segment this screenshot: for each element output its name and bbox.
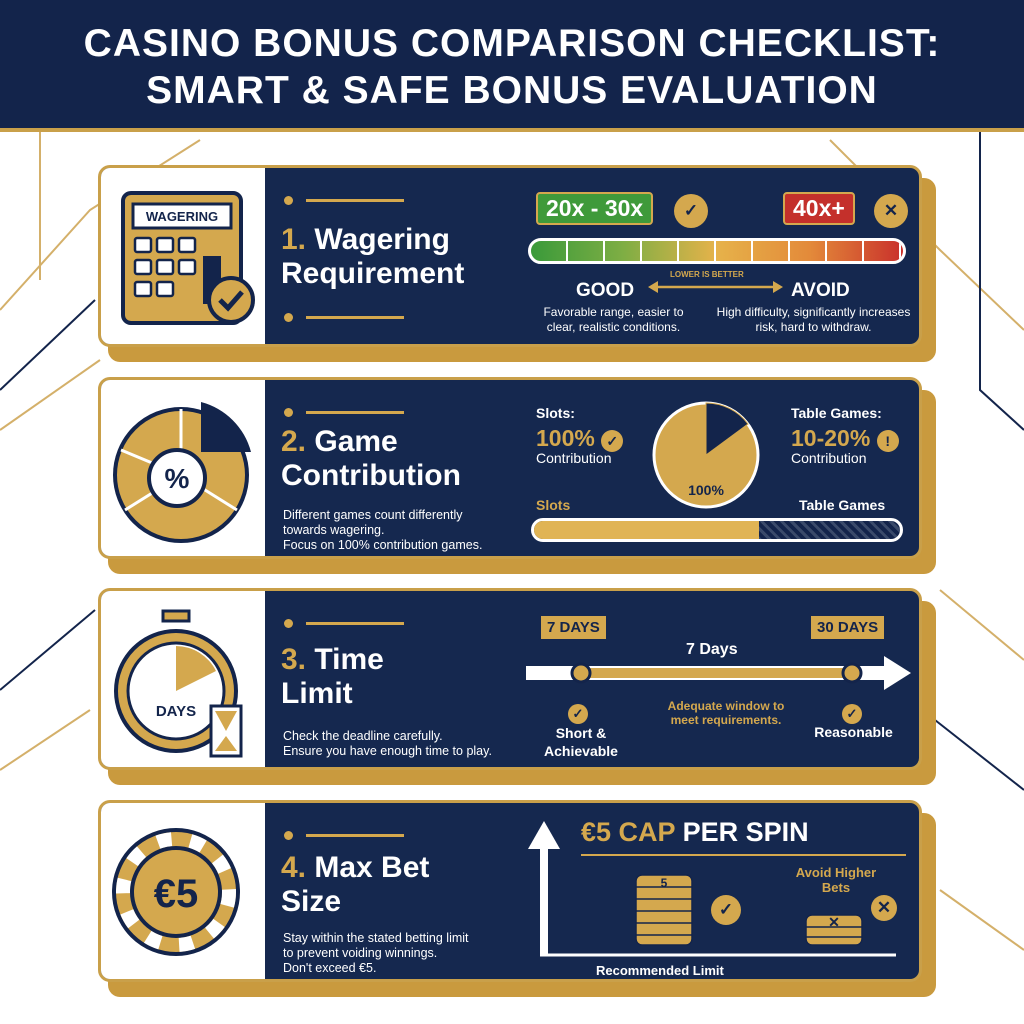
heading: Requirement (281, 257, 464, 290)
chart: contribution: Table Games (799, 497, 885, 513)
description (283, 729, 492, 758)
icon: calculator (101, 168, 265, 344)
heading: 4. Max Bet (281, 851, 429, 884)
chart: bet cap: €5 CAP PER SPIN (581, 817, 809, 847)
icon: pie: % (165, 463, 190, 494)
chart: bet cap: Bets (822, 880, 850, 895)
description: Stay within the stated betting limit (283, 931, 469, 945)
title (0, 0, 1024, 132)
heading: 1. Wagering (281, 223, 450, 256)
chart: contribution: ! (885, 433, 890, 449)
chart: bet cap: 5 (661, 876, 668, 890)
chart: contribution (531, 402, 903, 542)
chart: bet cap: Avoid Higher (796, 865, 876, 880)
description: to prevent voiding winnings. (283, 946, 437, 960)
chart: timeline: Short & (556, 725, 606, 741)
chart: timeline (526, 616, 911, 759)
chart: bet cap: ✕ (877, 898, 891, 917)
chart: contribution: Slots (536, 497, 570, 513)
chart: wagering scale: Favorable range, easier to clear, realistic conditions. (543, 305, 684, 334)
chart: wagering scale: GOOD (576, 280, 634, 301)
heading (281, 425, 461, 492)
chart: contribution: Contribution (791, 450, 866, 466)
icon: chip (101, 803, 265, 979)
chart: wagering scale: ✕ (884, 201, 898, 220)
description: Don't exceed €5. (283, 961, 376, 975)
chart: wagering scale: 20x - 30x (546, 195, 643, 221)
chart: timeline: 30 DAYS (817, 619, 878, 636)
chart: timeline: ✓ (847, 706, 857, 721)
heading: Size (281, 885, 341, 918)
icon: stopwatch (101, 591, 265, 767)
description: Check the deadline carefully. (283, 729, 443, 743)
panel: time limit (98, 588, 922, 770)
chart: contribution: 100% (688, 482, 724, 498)
panel: game contribution (98, 377, 922, 559)
chart: wagering scale: High difficulty, significantly increases risk, hard to withdraw. (717, 305, 910, 334)
panel: wagering requirement (98, 165, 922, 347)
chart: timeline: Reasonable (814, 724, 893, 740)
chart: timeline: Achievable (544, 743, 618, 759)
description: Focus on 100% contribution games. (283, 538, 482, 552)
description: Different games count differently (283, 508, 462, 522)
chart: contribution: 100% (536, 425, 595, 451)
heading: 2. Game (281, 425, 398, 458)
chart: wagering scale (528, 192, 910, 334)
title: SMART & SAFE BONUS EVALUATION (146, 69, 878, 112)
chart: timeline: 7 DAYS (547, 619, 600, 636)
chart: timeline: ✓ (573, 706, 583, 721)
chart: bet cap: ✕ (828, 914, 840, 930)
chart: timeline: Adequate window to (668, 699, 784, 713)
chart: wagering scale: 40x+ (793, 195, 845, 221)
description (283, 931, 469, 975)
description: towards wagering. (283, 523, 384, 537)
chart: contribution: Slots: (536, 405, 575, 421)
heading (281, 851, 429, 918)
chart: timeline: 7 Days (686, 641, 738, 658)
icon: stopwatch: DAYS (156, 703, 196, 720)
title: CASINO BONUS COMPARISON CHECKLIST: (84, 22, 940, 65)
chart: bet cap (528, 817, 906, 978)
chart: contribution: 10-20% (791, 425, 870, 451)
chart: bet cap: Recommended Limit (596, 963, 724, 978)
description (283, 508, 482, 552)
icon: pie (101, 380, 265, 556)
chart: contribution: Table Games: (791, 405, 882, 421)
chart: timeline: meet requirements. (671, 713, 781, 727)
scale bar (528, 238, 906, 264)
icon: calculator: WAGERING (146, 209, 218, 224)
chart: contribution: ✓ (606, 433, 618, 449)
heading (281, 643, 384, 710)
heading: 3. Time (281, 643, 384, 676)
icon: chip: €5 (154, 872, 198, 916)
heading: Limit (281, 677, 353, 710)
chart: wagering scale: ✓ (684, 201, 698, 220)
heading: Contribution (281, 459, 461, 492)
chart: bet cap: ✓ (719, 900, 733, 919)
chart: contribution: Contribution (536, 450, 612, 466)
chart: wagering scale: LOWER IS BETTER (670, 270, 744, 279)
description: Ensure you have enough time to play. (283, 744, 492, 758)
panel: max bet size (98, 800, 922, 982)
chart: wagering scale: AVOID (791, 280, 850, 301)
heading (281, 223, 464, 290)
